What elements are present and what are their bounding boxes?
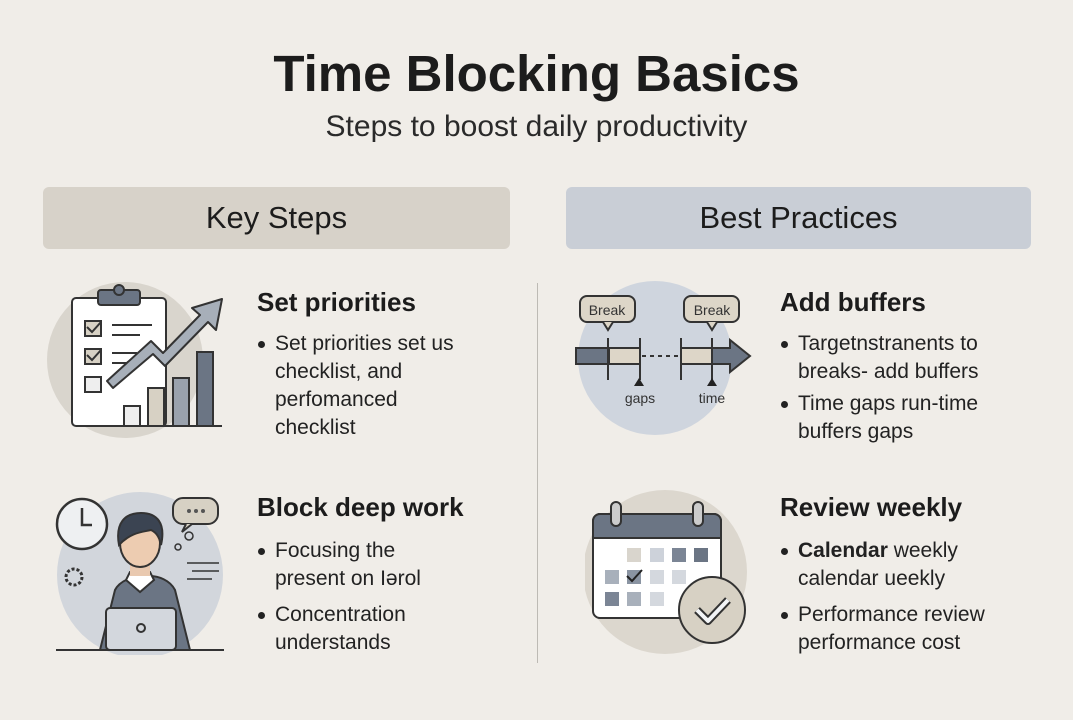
practice: Review weekly: Performance review performance cost [798,603,985,654]
step: Block deep work: Focusing the present on Iərol [275,539,421,590]
title: Time Blocking Basics [273,45,800,102]
step: Set priorities [257,287,454,439]
practice: Add buffers: Targetnstranents to breaks- add buffers [798,332,979,383]
icon: person at laptop [56,492,224,655]
icon: clipboard chart [47,282,223,438]
practice: Add buffers [780,287,979,443]
practice: Review weekly [780,492,985,654]
header: Best Practices [566,187,1031,249]
icon: timeline with breaks: Break [694,302,731,318]
practice: Add buffers: Add buffers [780,287,926,317]
step: Set priorities: Set priorities set us checklist, and perfomanced checklist [275,332,454,439]
icon: timeline with breaks: Break [589,302,626,318]
step: Block deep work [257,492,464,654]
subtitle: Steps to boost daily productivity [326,110,747,143]
step: Block deep work: Concentration understands [275,603,406,654]
practice: Review weekly: Review weekly [780,492,962,522]
header: Key Steps: Key Steps [206,200,347,235]
icon: calendar check [585,490,747,654]
header: Best Practices: Best Practices [699,200,898,235]
practice: Review weekly: Calendar weekly calendar ueekly [798,539,958,590]
divider [537,283,538,663]
step: Set priorities: Set priorities [257,287,416,317]
step: Block deep work: Block deep work [257,492,464,522]
icon: timeline with breaks: gaps [625,390,655,406]
practice: Add buffers: Time gaps run-time buffers gaps [798,392,978,443]
icon: timeline with breaks: time [699,390,725,406]
icon: timeline with breaks [575,281,752,435]
header: Key Steps [43,187,510,249]
